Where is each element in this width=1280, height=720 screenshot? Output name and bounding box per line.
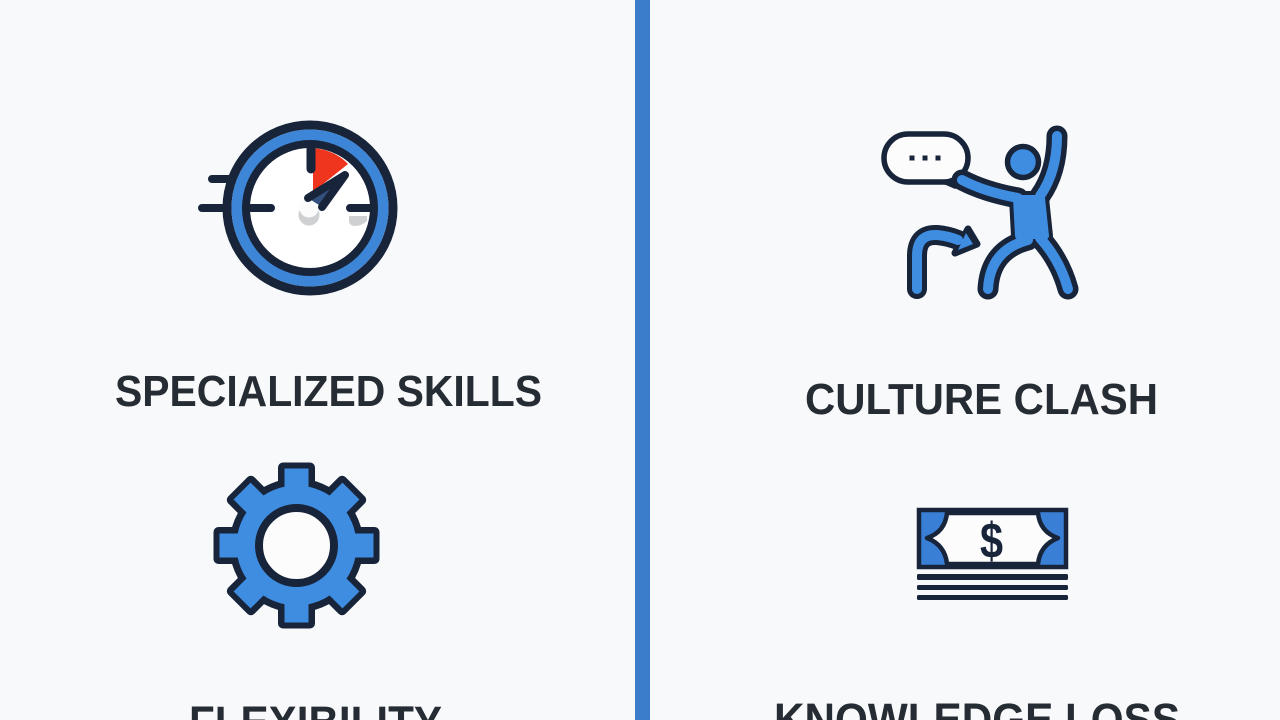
icon: stack of money <box>917 510 1068 600</box>
person figure <box>962 136 1068 289</box>
icon: gear <box>214 462 380 628</box>
icon: stopwatch <box>202 125 393 291</box>
heading: specialized skills: SPECIALIZED SKILLS <box>115 367 542 416</box>
panel: right column <box>774 134 1180 720</box>
heading: culture clash: CULTURE CLASH <box>805 375 1158 424</box>
center divider <box>635 0 650 720</box>
icon: person with speech bubble and arrow <box>884 134 1068 289</box>
panel: left column <box>115 125 542 720</box>
speech bubble <box>884 134 968 186</box>
icon: stack of money: $ <box>980 513 1003 569</box>
curved arrow <box>917 229 977 289</box>
